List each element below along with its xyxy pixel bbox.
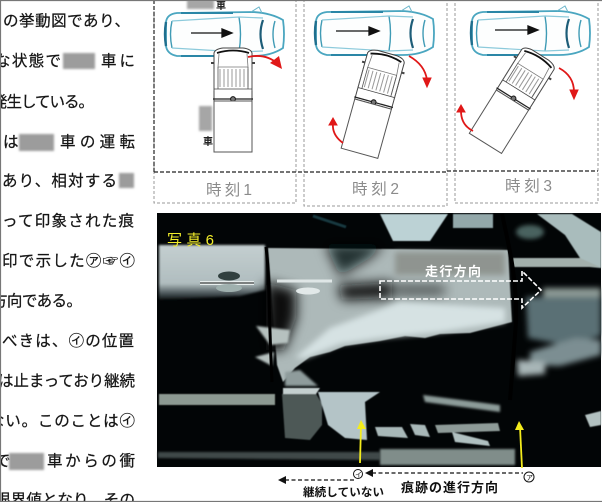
door handle left [200, 272, 254, 292]
caption: discontinued arrow: 継続していない [303, 485, 384, 499]
right damaged panel [517, 288, 601, 376]
arrow: yellow pointer a [515, 421, 524, 468]
divider: dark dashed line [154, 0, 598, 172]
label: time 1: 時刻1 [206, 181, 252, 199]
label: time 2: 時刻2 [352, 180, 399, 198]
panel: time 1 [154, 0, 296, 203]
arrowhead: red rotation rear, time 3 [457, 105, 465, 112]
door gap [266, 247, 272, 382]
label: blurred vehicle name beside truck: 車 [203, 135, 213, 148]
icon: truck, time 1 [211, 48, 255, 152]
text column: body paragraph: 印で示した㋐☞㋑ [2, 252, 135, 270]
icon: van, time 3 [471, 6, 590, 55]
shadows on panel [266, 244, 445, 350]
arrowhead: red rotation front, time 3 [570, 90, 578, 99]
arrow: travel direction, white dashed [380, 271, 541, 308]
caption: discontinued arrow [278, 476, 384, 499]
text column: body paragraph: 車からの衝 [47, 452, 135, 470]
arrow: red rotation rear, time 3 [461, 111, 473, 131]
top windows and roof area [313, 214, 601, 268]
marker: i [354, 470, 362, 479]
icon: van, time 2 [315, 6, 434, 55]
bright highlight on panel [295, 302, 505, 358]
icon: truck, time 3 [467, 43, 559, 155]
arrow: red rotation rear, time 2 [333, 124, 343, 143]
text column: body paragraph: は [3, 134, 19, 151]
crease blobs by the seam [255, 326, 290, 366]
marker: a: ア [526, 474, 533, 482]
text column: body paragraph: は止まっており継続 [0, 372, 135, 390]
text column: body paragraph: あり、相対する [2, 172, 117, 190]
arrow: red rotation front, time 3 [559, 68, 574, 92]
panel: time 2 [304, 0, 447, 206]
label: blurred vehicle name above van: 車 [216, 0, 226, 12]
icon: van, time 1 [165, 7, 284, 56]
arrow: red rotation front, time 2 [409, 56, 427, 80]
sill stripe [159, 394, 275, 405]
left door panel [159, 245, 265, 300]
arrow: van direction, time 1 [191, 29, 232, 37]
text column: body paragraph: 車に [101, 52, 135, 70]
arrowhead: red rotation front, time 2 [423, 78, 431, 87]
label: blurred vehicle name beside truck [199, 106, 213, 148]
door handle right [277, 281, 332, 294]
panel: time 3 [455, 0, 598, 203]
arrow: van direction, time 3 [495, 26, 538, 34]
text column: body paragraph: 車の運転 [60, 133, 135, 151]
label: photo 6: 写真6 [167, 231, 214, 249]
label: blurred vehicle name above van [187, 0, 226, 12]
lower damaged area [282, 370, 601, 446]
marker: i: イ [355, 472, 362, 479]
label: travel direction: 走行方向 [425, 264, 481, 279]
arrow: van direction, time 2 [336, 27, 379, 35]
text column: body paragraph [0, 12, 135, 502]
central body panel [268, 248, 512, 382]
label: time 3: 時刻3 [505, 177, 552, 195]
tan top highlight [395, 252, 505, 275]
text column: body paragraph: べきは、㋑の位置 [2, 332, 134, 350]
arrowhead: red rotation, time 1 [270, 56, 282, 69]
caption: trace direction arrow [365, 469, 523, 495]
icon: truck, time 2 [338, 47, 408, 159]
photo 6: damaged car side [157, 213, 601, 468]
text column: body paragraph: の挙動図であり、 [3, 12, 130, 30]
caption: trace direction arrow: 痕跡の進行方向 [401, 480, 498, 495]
arrowhead: red rotation rear, time 2 [329, 118, 337, 125]
lower body band [158, 452, 380, 460]
arrow: yellow pointer i [357, 420, 366, 463]
text column: body paragraph: って印象された痕 [2, 212, 134, 230]
marker: a [524, 472, 534, 482]
arrow: red rotation, time 1 [248, 56, 278, 64]
